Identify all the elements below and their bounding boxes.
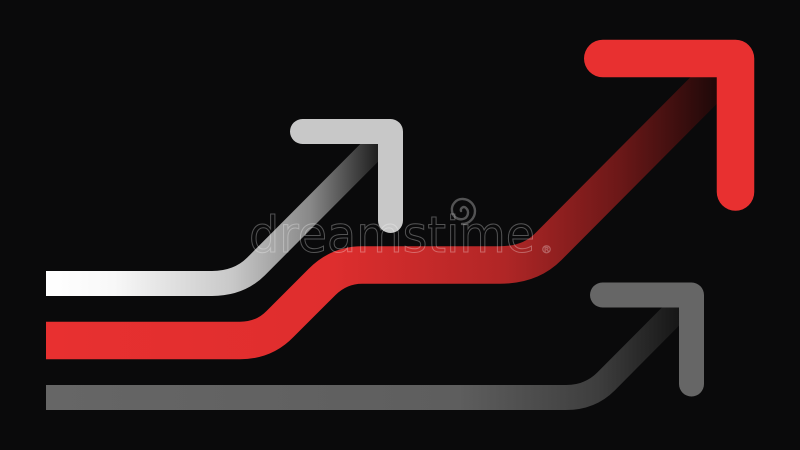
red arrow shaft	[46, 66, 728, 340]
red arrow	[46, 58, 736, 340]
gray arrow	[46, 295, 692, 398]
red arrow head	[603, 58, 736, 192]
watermark spiral icon	[452, 199, 475, 224]
white arrow shaft	[46, 137, 385, 284]
white arrow head	[302, 132, 390, 220]
watermark	[249, 199, 552, 264]
watermark wordmark: dreamstime	[249, 206, 535, 264]
watermark registered mark: ®	[541, 243, 552, 256]
gray arrow shaft	[46, 301, 686, 398]
white arrow	[46, 132, 390, 284]
gray arrow head	[602, 295, 692, 384]
